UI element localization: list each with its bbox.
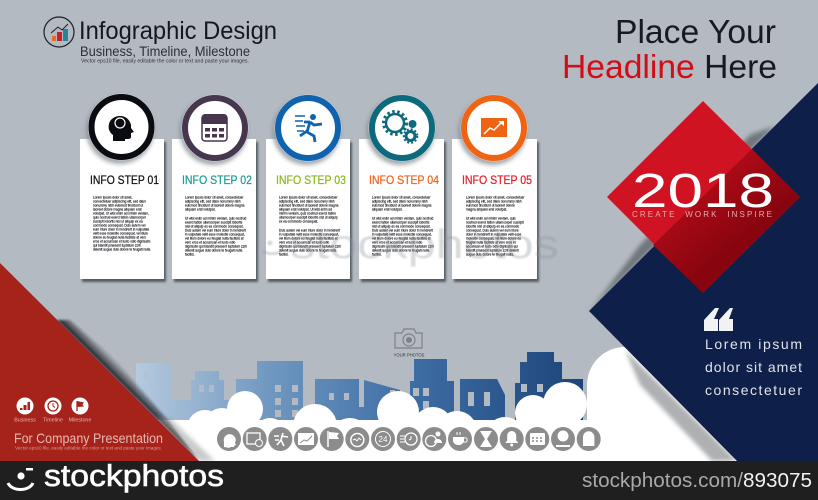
quote	[704, 308, 802, 398]
step 3 text: delenit augue duis dolore te feugait nulla	[279, 248, 336, 252]
icon: runner	[295, 114, 322, 142]
panel: red triangle	[0, 263, 199, 461]
diamond shaded half	[653, 149, 800, 293]
panel: step 4	[359, 94, 446, 282]
icon labels: Business	[14, 418, 36, 424]
step 2 heading: INFO STEP 02	[182, 173, 252, 187]
icon: chart	[294, 427, 318, 451]
step 5 text: euismod tincidunt ut laoreet dolore	[466, 204, 515, 208]
icon: head	[217, 427, 241, 451]
step 3 text: dignissim qui blandit praesent luptatum zzril	[279, 244, 341, 248]
shadow: red triangle edge	[57, 320, 199, 461]
headline	[562, 13, 777, 85]
icon: stopwatch	[345, 427, 369, 451]
step 1 text: consectetuer adipiscing elit, sed diam	[93, 200, 146, 204]
step 1 text: nonummy nibh euismod tincidunt ut	[93, 204, 143, 208]
step 1 text: commodo consequat. Duis autem vel	[93, 224, 146, 228]
step 5 text: consequat. Duis autem vel eum iriure	[466, 228, 519, 232]
step 1 text: quis nostrud exerci tation ullamcorper	[93, 216, 147, 220]
step 5 text: magna aliquam erat volutpat.	[466, 208, 507, 212]
icon: timeline	[44, 398, 62, 414]
step 5 text: Lorem ipsum dolor sit amet, consectetuer	[466, 196, 525, 200]
step 4 text: nisl ut aliquip ex ea commodo consequat.	[372, 224, 431, 228]
step 3 text: Duis autem vel eum iriure dolor in hendrerit	[279, 228, 340, 232]
step 2 text: delenit augue duis dolore te feugait nulla	[185, 248, 242, 252]
step 1 text: eros et accumsan et iusto odio dignissim	[93, 240, 151, 244]
step 3 text: vero eros et accumsan et iusto odio	[279, 240, 330, 244]
title: Infographic Design	[79, 17, 277, 45]
step 5 text: lobortis nisl ut aliquip ex ea commodo	[466, 224, 519, 228]
shadow: navy upper edge	[589, 126, 775, 312]
step 4 text: aliquam erat volutpat.	[372, 208, 403, 212]
icon: calendar	[243, 427, 267, 451]
panel: step 5	[452, 94, 539, 282]
tagline: CREATE WORK INSPIRE	[632, 210, 772, 219]
step 3 text: minim veniam, quis nostrud exerci tation	[279, 212, 336, 216]
shadow: navy lower edge	[625, 350, 737, 461]
clouds	[150, 347, 740, 461]
step 5 text: dolor in hendrerit in vulputate velit esse	[466, 232, 522, 236]
step 1 text: laoreet dolore magna aliquam erat	[93, 208, 142, 212]
camera placeholder	[394, 329, 425, 358]
step 1 text: suscipit lobortis nisl ut aliquip ex ea	[93, 220, 143, 224]
step 1 text: volutpat. Ut wisi enim ad minim veniam,	[93, 212, 149, 216]
panel: step 1	[80, 94, 166, 282]
step 4 text: Ut wisi enim ad minim veniam, quis nostrud	[372, 216, 434, 220]
small note: Vector eps10 file, easily editable the color or text and paste your images.	[81, 58, 249, 64]
step 3 text: euismod tincidunt ut laoreet dolore magna	[279, 204, 339, 208]
step 1 text: qui blandit praesent luptatum zzril	[93, 244, 141, 248]
icon: calendar grid	[525, 427, 549, 451]
step 2 text: Ut wisi enim ad minim veniam, quis nostrud	[185, 216, 247, 220]
panel: step 2	[172, 94, 258, 282]
step 5 text: accumsan et iusto odio dignissim qui	[466, 244, 518, 248]
icon: flag	[320, 427, 344, 451]
step 1 text: eum iriure dolor in hendrerit in vulputate	[93, 228, 149, 232]
step 3 text: facilisi.	[279, 252, 289, 256]
step 1 heading: INFO STEP 01	[90, 173, 159, 187]
camera label: YOUR PHOTOS	[394, 352, 425, 358]
step 3 text: vel illum dolore eu feugiat nulla facilisis at	[279, 236, 338, 240]
step 2 text: exerci tation ullamcorper suscipit lobortis	[185, 220, 243, 224]
bottom-left items	[14, 398, 163, 450]
step 2 text: in vulputate velit esse molestie consequat,	[185, 232, 245, 236]
quote marks	[704, 308, 733, 331]
shadow: red triangle on white	[155, 417, 215, 461]
footer url: stockphotos.com/ 893075	[582, 470, 812, 492]
icon labels: Milestone	[69, 418, 91, 424]
step 2 text: dignissim qui blandit praesent luptatum zzril	[185, 244, 247, 248]
step 5 text: augue duis dolore te feugait nulla.	[466, 252, 514, 256]
icon: coffee cup	[448, 427, 472, 451]
quote text: dolor sit amet	[705, 359, 802, 375]
step 4 text: in vulputate velit esse molestie consequat,	[372, 232, 432, 236]
step 2 text: euismod tincidunt ut laoreet dolore magna	[185, 204, 245, 208]
step 5 text: nostrud exerci tation ullamcorper suscipit	[466, 220, 524, 224]
step 4 text: exerci tation ullamcorper suscipit lobortis	[372, 220, 430, 224]
step 4 text: facilisi.	[372, 252, 382, 256]
presentation note: Vector eps10 file, easily editable the color or text and paste your images.	[15, 446, 162, 450]
step 2 text: vero eros et accumsan et iusto odio	[185, 240, 236, 244]
step 2 text: vel illum dolore eu feugiat nulla facilisis at	[185, 236, 244, 240]
logo icon	[44, 17, 74, 47]
step 3 text: ex ea commodo consequat.	[279, 220, 318, 224]
step 1 text: delenit augue duis dolore te feugait nulla	[93, 248, 150, 252]
step 3 text: ullamcorper suscipit lobortis nisl ut aliquip	[279, 216, 338, 220]
step 4 text: adipiscing elit, sed diam nonummy nibh	[372, 200, 428, 204]
step 5 text: adipiscing elit, sed diam nonummy nibh	[466, 200, 522, 204]
icon: hand with clock	[551, 427, 575, 451]
watermark: stockphotos	[290, 221, 559, 267]
icon: clock person	[422, 427, 446, 451]
presentation title: For Company Presentation	[14, 430, 163, 446]
step 4 text: dignissim qui blandit praesent luptatum zzril	[372, 244, 434, 248]
quote text: Lorem ipsum	[705, 336, 802, 352]
icon: calendar	[202, 114, 227, 141]
panel: red diamond	[607, 101, 800, 293]
step 1 text: velit esse molestie consequat, vel illum	[93, 232, 148, 236]
step 5 text: Ut wisi enim ad minim veniam, quis	[466, 216, 516, 220]
step 3 text: in vulputate velit esse molestie consequat,	[279, 232, 339, 236]
step 3 text: aliquam erat volutpat. Ut wisi enim ad	[279, 208, 332, 212]
icon labels	[14, 418, 91, 424]
step 4 heading: INFO STEP 04	[369, 173, 439, 187]
step 2 text: Lorem ipsum dolor sit amet, consectetuer	[185, 196, 244, 200]
icon: 24 hours	[371, 427, 395, 451]
subtitle: Business, Timeline, Milestone	[80, 43, 250, 59]
icon: business	[16, 398, 34, 414]
step 4 text: vero eros et accumsan et iusto odio	[372, 240, 423, 244]
step 2 text: Duis autem vel eum iriure dolor in hendrerit	[185, 228, 246, 232]
city skyline	[136, 352, 583, 425]
panel: step 3	[266, 94, 352, 282]
footer bar	[0, 458, 818, 500]
step 2 text: aliquam erat volutpat.	[185, 208, 216, 212]
step 2 text: nisl ut aliquip ex ea commodo consequat.	[185, 224, 244, 228]
icon: runner	[268, 427, 292, 451]
icon: bell	[500, 427, 524, 451]
icon: gears	[384, 112, 417, 143]
icon: lock	[577, 427, 601, 451]
step 1 text: Lorem ipsum dolor sit amet,	[93, 196, 132, 200]
icon: fast clock	[397, 427, 421, 451]
panel: navy shape	[589, 83, 818, 461]
icon: 24 hours: 24	[379, 435, 388, 444]
icon labels: Timeline	[43, 418, 63, 424]
step 3 heading: INFO STEP 03	[276, 173, 346, 187]
step 4 text: delenit augue duis dolore te feugait nulla	[372, 248, 429, 252]
footer logo: stockphotos	[44, 458, 224, 493]
year: 2018	[632, 165, 774, 218]
step 3 text: adipiscing elit, sed diam nonummy nibh	[279, 200, 335, 204]
quote text: consectetuer	[705, 382, 802, 398]
step 2 text: facilisi.	[185, 252, 195, 256]
headline line 1: Place Your	[615, 13, 776, 50]
icon: head with gear	[109, 116, 134, 141]
step 5 heading: INFO STEP 05	[462, 173, 532, 187]
step 4 text: euismod tincidunt ut laoreet dolore magna	[372, 204, 432, 208]
step 5 text: blandit praesent luptatum zzril delenit	[466, 248, 519, 252]
step 5 text: molestie consequat, vel illum dolore eu	[466, 236, 521, 240]
icon row	[217, 427, 601, 451]
icon: hourglass	[474, 427, 498, 451]
step 4 text: Lorem ipsum dolor sit amet, consectetuer	[372, 196, 431, 200]
step 1 text: dolore eu feugiat nulla facilisis at vero	[93, 236, 146, 240]
step 3 text: Lorem ipsum dolor sit amet, consectetuer	[279, 196, 338, 200]
icon: chart board	[481, 118, 507, 137]
step 2 text: adipiscing elit, sed diam nonummy nibh	[185, 200, 241, 204]
step 4 text: vel illum dolore eu feugiat nulla facilisis at	[372, 236, 431, 240]
headline line 2: Headline Here	[562, 48, 777, 85]
icon: milestone	[72, 398, 88, 414]
step 4 text: Duis autem vel eum iriure dolor in hendrerit	[372, 228, 433, 232]
step 5 text: feugiat nulla facilisis at vero eros et	[466, 240, 516, 244]
